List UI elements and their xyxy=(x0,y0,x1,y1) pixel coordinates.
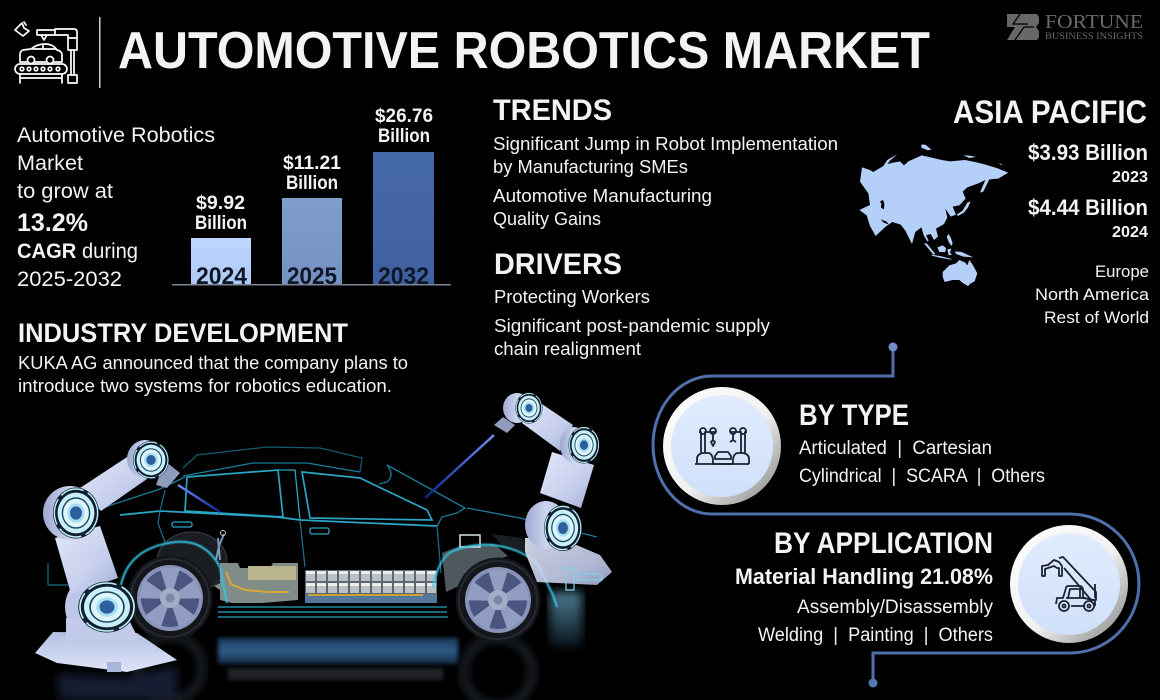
header divider xyxy=(99,17,100,88)
growth text block: Market xyxy=(17,152,83,175)
by application text: Welding | Painting | Others xyxy=(758,625,993,646)
by type text xyxy=(799,399,1045,487)
bar 2025 xyxy=(282,153,342,290)
drivers: Significant post-pandemic supply xyxy=(494,315,771,336)
by application circle with crane truck icon xyxy=(1010,525,1128,643)
by application text xyxy=(735,527,993,646)
bar 2032 xyxy=(373,106,434,290)
bar 2032: $26.76 xyxy=(375,106,433,127)
logo: Fortune Business Insights xyxy=(1007,11,1143,42)
growth text block: Automotive Robotics xyxy=(17,124,215,147)
rear wheel arch glow xyxy=(120,542,557,607)
electronics module xyxy=(214,530,298,603)
car body outline xyxy=(48,447,597,617)
icon: material handling truck xyxy=(1042,557,1096,611)
asia pacific text: North America xyxy=(1035,285,1150,304)
trends: Automotive Manufacturing xyxy=(493,185,712,206)
header icon: robot arm over car on conveyor xyxy=(15,22,77,83)
bar chart: market size xyxy=(172,106,451,290)
trends: Quality Gains xyxy=(493,208,601,229)
front wheel xyxy=(456,558,540,642)
industry development: KUKA AG announced that the company plans to xyxy=(18,353,408,373)
by type text: BY TYPE xyxy=(799,399,909,432)
icon: twin robot arms with car xyxy=(695,428,749,464)
asia pacific text: 2024 xyxy=(1112,224,1148,241)
bar 2025: 2025 xyxy=(287,263,337,290)
rear tyre behind arch xyxy=(157,532,227,592)
growth text block: 2025-2032 xyxy=(17,268,122,291)
logo: Fortune Business Insights: BUSINESS INSIGHTS xyxy=(1045,31,1143,42)
bar 2024: $9.92 xyxy=(196,193,245,214)
trends: TRENDS xyxy=(493,94,612,127)
bar 2024 xyxy=(191,193,251,290)
drivers xyxy=(494,248,771,359)
by type text: Cylindrical | SCARA | Others xyxy=(799,466,1045,487)
by type circle with robots icon xyxy=(663,387,781,505)
right robot arm xyxy=(425,392,612,590)
battery pack xyxy=(305,570,437,603)
connector line xyxy=(653,342,1139,688)
map: asia pacific xyxy=(859,145,1008,286)
drivers: Protecting Workers xyxy=(494,286,650,307)
industry development xyxy=(18,318,408,396)
trends xyxy=(493,94,838,229)
bar 2024: 2024 xyxy=(196,263,248,290)
bar 2024: Billion xyxy=(195,213,247,234)
illustration: car with robot arms xyxy=(35,392,612,700)
bar 2025: Billion xyxy=(286,173,338,194)
asia pacific text: Europe xyxy=(1095,262,1149,281)
by application text: Material Handling 21.08% xyxy=(735,564,993,589)
bar 2032: Billion xyxy=(378,126,430,147)
logo: Fortune Business Insights: FORTUNE xyxy=(1045,11,1143,33)
drivers: chain realignment xyxy=(494,338,641,359)
title: AUTOMOTIVE ROBOTICS MARKET xyxy=(118,22,930,80)
trends: by Manufacturing SMEs xyxy=(493,156,688,177)
bar 2032: 2032 xyxy=(378,263,429,290)
growth text block: 13.2% xyxy=(17,209,88,237)
growth text block: to grow at xyxy=(17,180,113,203)
trends: Significant Jump in Robot Implementation xyxy=(493,133,838,154)
asia pacific text: $4.44 Billion xyxy=(1028,195,1148,220)
asia pacific text: Rest of World xyxy=(1044,308,1149,327)
rear wheel xyxy=(128,556,212,640)
asia pacific text: ASIA PACIFIC xyxy=(953,94,1147,130)
growth text block xyxy=(17,124,215,291)
asia pacific text xyxy=(953,94,1150,327)
by application text: Assembly/Disassembly xyxy=(797,597,993,618)
by type text: Articulated | Cartesian xyxy=(799,438,992,459)
left robot arm xyxy=(35,440,220,672)
asia pacific text: $3.93 Billion xyxy=(1028,140,1148,165)
reflection on floor xyxy=(57,592,582,700)
industry development: introduce two systems for robotics education. xyxy=(18,376,392,396)
engine bay xyxy=(442,534,534,592)
growth text block: CAGR during xyxy=(17,240,138,263)
drivers: DRIVERS xyxy=(494,248,622,281)
by application text: BY APPLICATION xyxy=(774,527,993,560)
asia pacific text: 2023 xyxy=(1112,169,1148,186)
industry development: INDUSTRY DEVELOPMENT xyxy=(18,318,348,348)
bar 2025: $11.21 xyxy=(283,153,341,174)
